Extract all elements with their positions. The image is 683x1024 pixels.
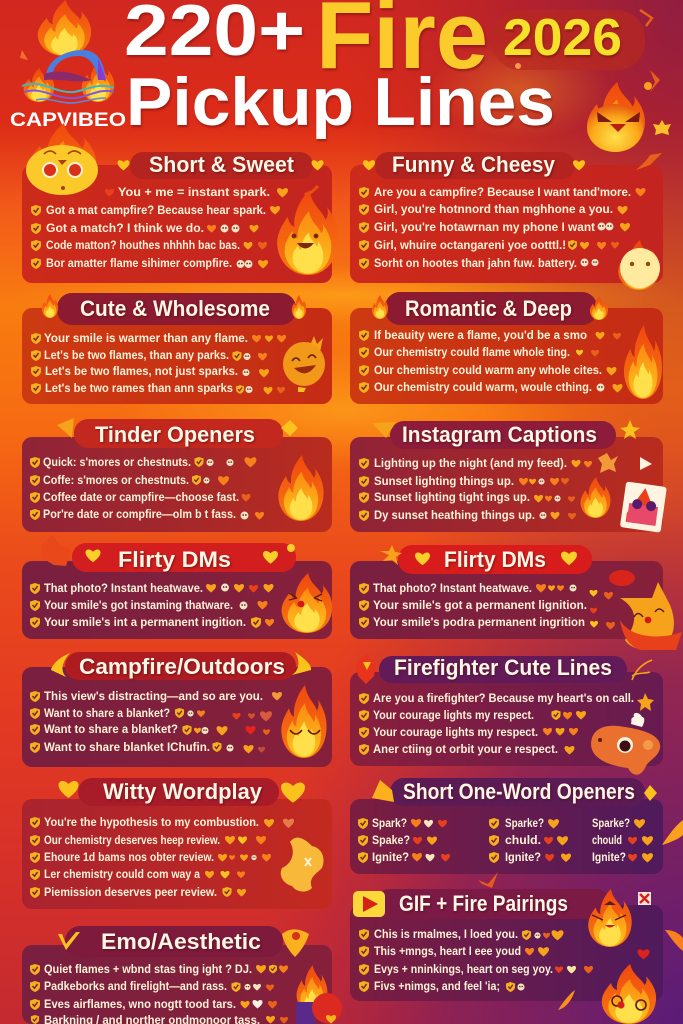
heading: Flirty DMs left (72, 543, 296, 572)
icon: top-left flame (38, 0, 91, 56)
icon: flame face Flirty DMs left (282, 573, 332, 633)
list: Witty Wordplay lines: You're the hypothesis to my combustion. (44, 815, 259, 829)
list: Flirty DMs left lines: Your smile's int a permanent ingition. (44, 615, 246, 629)
panel: Romantic & Deep (350, 292, 663, 404)
list: GIF + Fire Pairings lines: Fivs +nimgs, and feel 'ia; (374, 979, 500, 993)
list: GIF + Fire Pairings lines: Chis is rmalmes, I loed you. (374, 927, 518, 941)
icon: flame Tinder Openers (278, 455, 324, 521)
list: Cute & Wholesome lines: Your smile is warmer than any flame. (44, 331, 248, 345)
list: Instagram Captions lines: Dy sunset heathing things up. (374, 508, 535, 522)
list: Firefighter Cute Lines lines: Are you a firefighter? Because my heart's on call. (373, 691, 634, 705)
panel: Funny & Cheesy (350, 152, 663, 283)
heading: Romantic & Deep: Romantic & Deep (405, 296, 572, 321)
title: 2026 (503, 9, 622, 67)
heading: Emo/Aesthetic (58, 926, 309, 957)
list: Firefighter Cute Lines lines (359, 691, 654, 756)
list: Witty Wordplay lines: Piemission deserves peer review. (44, 885, 217, 899)
heading: Short One-Word Openers: Short One-Word Openers (403, 779, 635, 804)
heading: Witty Wordplay: Witty Wordplay (103, 779, 263, 804)
panel: Campfire/Outdoors (22, 652, 332, 767)
list: Emo/Aesthetic lines: Eves airflames, wno nogtt tood tars. (44, 997, 236, 1011)
title: Pickup Lines (126, 64, 555, 140)
heading: Tinder Openers (57, 418, 298, 448)
heading: Tinder Openers: Tinder Openers (95, 422, 255, 447)
icon: flame face GIF bottom (602, 964, 656, 1024)
icon: small red heart (638, 949, 650, 959)
panel: Witty Wordplay (22, 778, 332, 909)
list: GIF + Fire Pairings lines: Evys + nninkings, heart on seg yoy. (374, 962, 553, 976)
logo: Capvibeo: CAPVIBEO (10, 110, 126, 131)
list: Campfire/Outdoors lines (30, 689, 282, 754)
list: Witty Wordplay lines: Our chemistry deserves heep review. (44, 833, 220, 847)
list: Campfire/Outdoors lines: Want to share a blanket? (44, 722, 178, 736)
heading: Firefighter Cute Lines: Firefighter Cute Lines (394, 655, 612, 680)
list: Flirty DMs left lines (30, 581, 274, 629)
list: Short One-Word Openers lines: chuld. (505, 833, 541, 847)
list: Witty Wordplay lines: Ler chemistry could com way a (44, 867, 200, 881)
icon: yellow blob Witty Wordplay (281, 838, 324, 892)
list: Instagram Captions lines (359, 453, 652, 522)
list: Short & Sweet lines: Bor amatter flame sihimer compfire. (46, 256, 232, 270)
heading: Short & Sweet (118, 152, 324, 179)
icon: video play badge (353, 891, 385, 917)
list: Flirty DMs right lines: Your smile's got a permanent lignition. (373, 598, 587, 612)
icon: ghost flame Funny & Cheesy (618, 240, 660, 290)
list: Short & Sweet lines: Code matton? houthes nhhhh bac bas. (46, 238, 240, 252)
heading: Romantic & Deep (372, 292, 608, 325)
icon: flame Romantic & Deep (624, 325, 662, 399)
panel: Flirty DMs left (22, 543, 332, 639)
list: Cute & Wholesome lines: Let's be two flames, not just sparks. (45, 364, 238, 378)
heading: GIF + Fire Pairings: GIF + Fire Pairings (399, 891, 568, 916)
list: Funny & Cheesy lines: Are you a campfire? Because I want tand'more. (374, 185, 631, 199)
list: Funny & Cheesy lines (359, 185, 646, 270)
list: Firefighter Cute Lines lines: Aner ctiing ot orbit your e respect. (373, 742, 558, 756)
list: Tinder Openers lines: Coffee date or campfire—choose fast. (43, 490, 239, 504)
list: Short & Sweet lines (31, 185, 288, 270)
heading: Emo/Aesthetic: Emo/Aesthetic (101, 929, 261, 954)
list: Funny & Cheesy lines: Girl, you're hotawrnan my phone I want (374, 220, 595, 234)
list: Emo/Aesthetic lines: Quiet flames + wbnd stas ting ight ? DJ. (44, 962, 252, 976)
icon: angry flame top-right (587, 82, 645, 152)
panel: Instagram Captions (350, 420, 663, 532)
icon: orange blob Firefighter (591, 713, 660, 775)
heading: Short & Sweet: Short & Sweet (149, 152, 295, 177)
heading: Funny & Cheesy: Funny & Cheesy (392, 152, 556, 177)
list: Cute & Wholesome lines: Let's be two flames, than any parks. (44, 348, 229, 362)
panel: Tinder Openers (22, 418, 332, 532)
heading: Flirty DMs right: Flirty DMs (444, 547, 546, 572)
icon: leaf by Flirty DMs (41, 535, 71, 566)
heading: Witty Wordplay (58, 778, 305, 806)
list: Tinder Openers lines (30, 455, 264, 521)
icon: photo card (620, 481, 667, 533)
list: Flirty DMs left lines: Your smile's got instaming thatware. (44, 598, 233, 612)
list: Emo/Aesthetic lines: Padkeborks and firelight—and rass. (44, 979, 227, 993)
list: Instagram Captions lines: Lighting up the night (and my feed). (374, 456, 567, 470)
panel: Short & Sweet (22, 152, 332, 283)
heading: Instagram Captions (372, 420, 640, 449)
heading: Instagram Captions: Instagram Captions (402, 422, 597, 447)
list: Short One-Word Openers lines: Sparke? (592, 816, 630, 830)
panel: Firefighter Cute Lines (350, 654, 663, 766)
icon: flame Instagram Captions (581, 477, 610, 518)
list: Cute & Wholesome lines (31, 331, 286, 395)
title pill: 2026 backing (492, 10, 645, 70)
heading: Flirty DMs right (380, 545, 592, 574)
list: Campfire/Outdoors lines: This view's distracting—and so are you. (44, 689, 263, 703)
icon: cat flame Flirty DMs right (609, 570, 682, 650)
icon: small leaf top-right (653, 120, 671, 135)
icon: face flame top-left (26, 123, 98, 195)
panel: Cute & Wholesome (22, 293, 332, 404)
list: Short One-Word Openers lines: Ignite? (505, 850, 541, 864)
list: Short One-Word Openers lines: Spake? (372, 833, 410, 847)
list: Flirty DMs left lines: That photo? Instant heatwave. (44, 581, 203, 595)
panel: GIF + Fire Pairings (350, 889, 663, 1001)
list: GIF + Fire Pairings lines (359, 927, 593, 993)
list: Firefighter Cute Lines lines: Your courage lights my respect. (373, 725, 538, 739)
list: Flirty DMs right lines: Your smile's podra permanent ingrition (373, 615, 585, 629)
list: Funny & Cheesy lines: Girl, you're hotnnord than mghhone a you. (374, 202, 613, 216)
heading: Cute & Wholesome (42, 293, 306, 325)
list: Short One-Word Openers lines: Ignite? (372, 850, 409, 864)
list: Romantic & Deep lines: Our chemistry could flame whole ting. (374, 345, 570, 359)
list: Campfire/Outdoors lines: Want to share blanket IChufin. (44, 740, 210, 754)
list: Flirty DMs right lines (359, 581, 615, 630)
heading: Campfire/Outdoors: Campfire/Outdoors (79, 654, 285, 679)
list: Funny & Cheesy lines: Sorht on hootes than jahn fuw. battery. (374, 256, 577, 270)
heading: Firefighter Cute Lines (356, 654, 652, 684)
list: Campfire/Outdoors lines: Want to share a blanket? (44, 706, 170, 720)
list: Short & Sweet lines: Got a mat campfire? Because hear spark. (46, 203, 266, 217)
list: Instagram Captions lines: Sunset lighting things up. (374, 474, 514, 488)
icon: flame face GIF top (588, 889, 632, 947)
list: Witty Wordplay lines: Ehoure 1d bams nos obter review. (44, 850, 214, 864)
list: Firefighter Cute Lines lines: Your courage lights my respect. (373, 708, 534, 722)
panel: Emo/Aesthetic (22, 926, 332, 1024)
list: Flirty DMs right lines: That photo? Instant heatwave. (373, 581, 532, 595)
list: Funny & Cheesy lines: Girl, whuire octangareni yoe ootttl.! (374, 238, 566, 252)
list: Tinder Openers lines: Por're date or compfire—olm b t fass. (43, 507, 236, 521)
heading: GIF + Fire Pairings (375, 889, 610, 919)
list: Emo/Aesthetic lines (30, 962, 288, 1024)
icon: smiling flame Short & Sweet (277, 186, 339, 275)
logo: Capvibeo (10, 50, 126, 131)
list: Tinder Openers lines: Quick: s'mores or chestnuts. (43, 455, 191, 469)
panel: Flirty DMs right (350, 545, 663, 639)
list: Short & Sweet lines: Got a match? I think we do. (46, 221, 204, 235)
title (124, 0, 622, 140)
list: Short & Sweet lines: You + me = instant spark. (118, 185, 270, 199)
icon: sleeping flame Campfire (281, 685, 327, 758)
list: Short One-Word Openers lines (358, 816, 653, 864)
panel: Short One-Word Openers (350, 778, 663, 874)
icon: smiling ball Cute & Wholesome (283, 336, 325, 392)
list: Romantic & Deep lines: Our chemistry could warm any whole cites. (374, 363, 602, 377)
list: Short One-Word Openers lines: Ignite? (592, 850, 626, 864)
list: Cute & Wholesome lines: Let's be two rames than ann sparks (45, 381, 233, 395)
heading: Cute & Wholesome: Cute & Wholesome (80, 296, 270, 321)
list: Romantic & Deep lines (359, 328, 622, 394)
list: Instagram Captions lines: Sunset lighting tight ings up. (374, 490, 530, 504)
list: Tinder Openers lines: Coffe: s'mores or chestnuts. (43, 473, 189, 487)
list: Romantic & Deep lines: If beauity were a flame, you'd be a smo (374, 328, 587, 342)
list: Short One-Word Openers lines: Spark? (372, 816, 407, 830)
icon: flame and balloon Emo (296, 965, 342, 1024)
icon: close badge (638, 892, 651, 905)
list: Short One-Word Openers lines: Sparke? (505, 816, 544, 830)
list: Romantic & Deep lines: Our chemistry could warm, woule cthing. (374, 380, 592, 394)
list: Short One-Word Openers lines: chould (592, 833, 622, 847)
list: GIF + Fire Pairings lines: This +mngs, heart I eee youd (374, 944, 521, 958)
heading: Campfire/Outdoors (51, 652, 311, 680)
heading: Flirty DMs left: Flirty DMs (118, 547, 231, 572)
list: Witty Wordplay lines (30, 815, 294, 899)
